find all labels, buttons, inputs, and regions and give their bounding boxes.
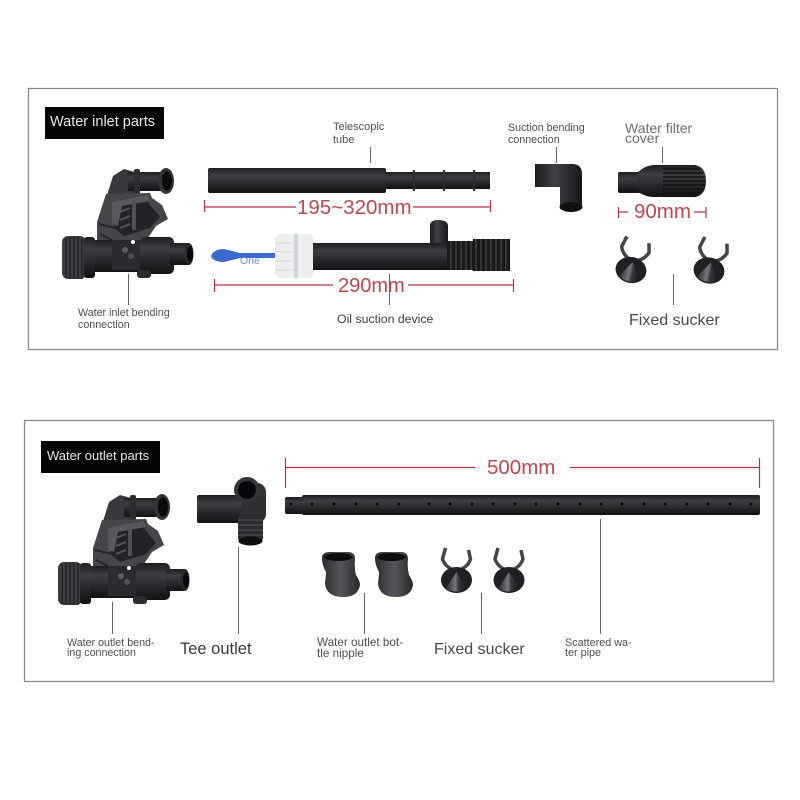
label: suction bending connection: connection [508, 134, 560, 146]
label: water outlet bottle nipple [317, 593, 403, 660]
label: suction bending connection [508, 122, 585, 163]
label: fixed sucker [434, 593, 525, 658]
panel: water outlet parts [24, 420, 774, 682]
label: oil suction device: Oil suction device [337, 312, 434, 326]
label: water outlet bottle nipple: tle nipple [317, 647, 364, 660]
label: telescopic tube: Telescopic [333, 121, 385, 133]
icon: telescopic tube [208, 168, 490, 193]
heading: water outlet parts [41, 441, 160, 473]
icon: water outlet bending connection [58, 494, 190, 605]
icon: fixed suckers [613, 235, 731, 286]
icon: scattered water pipe [285, 495, 760, 515]
icon: water inlet bending connection [62, 168, 194, 279]
dimension: 90mm: 90mm [634, 200, 691, 223]
label: fixed sucker [629, 274, 720, 329]
label: tee outlet: Tee outlet [180, 640, 252, 658]
icon: suction bending connection [535, 164, 582, 212]
dimension: 195~320mm [204, 196, 490, 219]
dimension: 500mm: 500mm [487, 456, 555, 479]
label: water filter cover: cover [625, 130, 660, 146]
icon: water outlet bottle nipples [322, 552, 413, 597]
label: water outlet bending connection [67, 602, 155, 659]
label: telescopic tube: tube [333, 134, 354, 146]
icon: water filter cover [618, 165, 706, 197]
icon: tee outlet [197, 477, 266, 546]
label: fixed sucker: Fixed sucker [629, 312, 720, 329]
label: water inlet bending connection: connection [78, 319, 130, 331]
label: suction bending connection: Suction bending [508, 122, 585, 134]
label: water inlet bending connection [78, 274, 170, 331]
heading: water outlet parts: Water outlet parts [47, 448, 150, 463]
label: telescopic tube [333, 121, 385, 163]
panel: water inlet parts [28, 88, 778, 350]
label: scattered water pipe: Scattered wa- [565, 637, 632, 649]
label: oil suction device [337, 274, 434, 326]
dimension: 290mm: 290mm [338, 275, 405, 297]
label: tee outlet [180, 547, 252, 658]
label: water filter cover [625, 120, 692, 163]
label: fixed sucker: Fixed sucker [434, 641, 525, 658]
icon: fixed suckers [441, 548, 524, 593]
label: water outlet bottle nipple: Water outlet bot- [317, 636, 403, 649]
icon: oil suction device [211, 220, 510, 278]
label: water inlet bending connection: Water inlet bending [78, 307, 170, 319]
heading: water inlet parts: Water inlet parts [50, 114, 155, 130]
heading: water inlet parts [45, 107, 164, 139]
label: water filter cover: Water filter [625, 120, 692, 136]
label: scattered water pipe [565, 519, 632, 659]
dimension: 500mm [286, 456, 760, 488]
dimension: 290mm [214, 275, 514, 297]
dimension: 195~320mm: 195~320mm [297, 196, 412, 219]
label: scattered water pipe: ter pipe [565, 647, 601, 659]
label: water outlet bending connection: Water outlet bend- [67, 637, 155, 649]
dimension: 90mm [618, 200, 706, 223]
icon: oil suction device: One [240, 255, 260, 267]
label: water outlet bending connection: ing connection [67, 647, 136, 659]
